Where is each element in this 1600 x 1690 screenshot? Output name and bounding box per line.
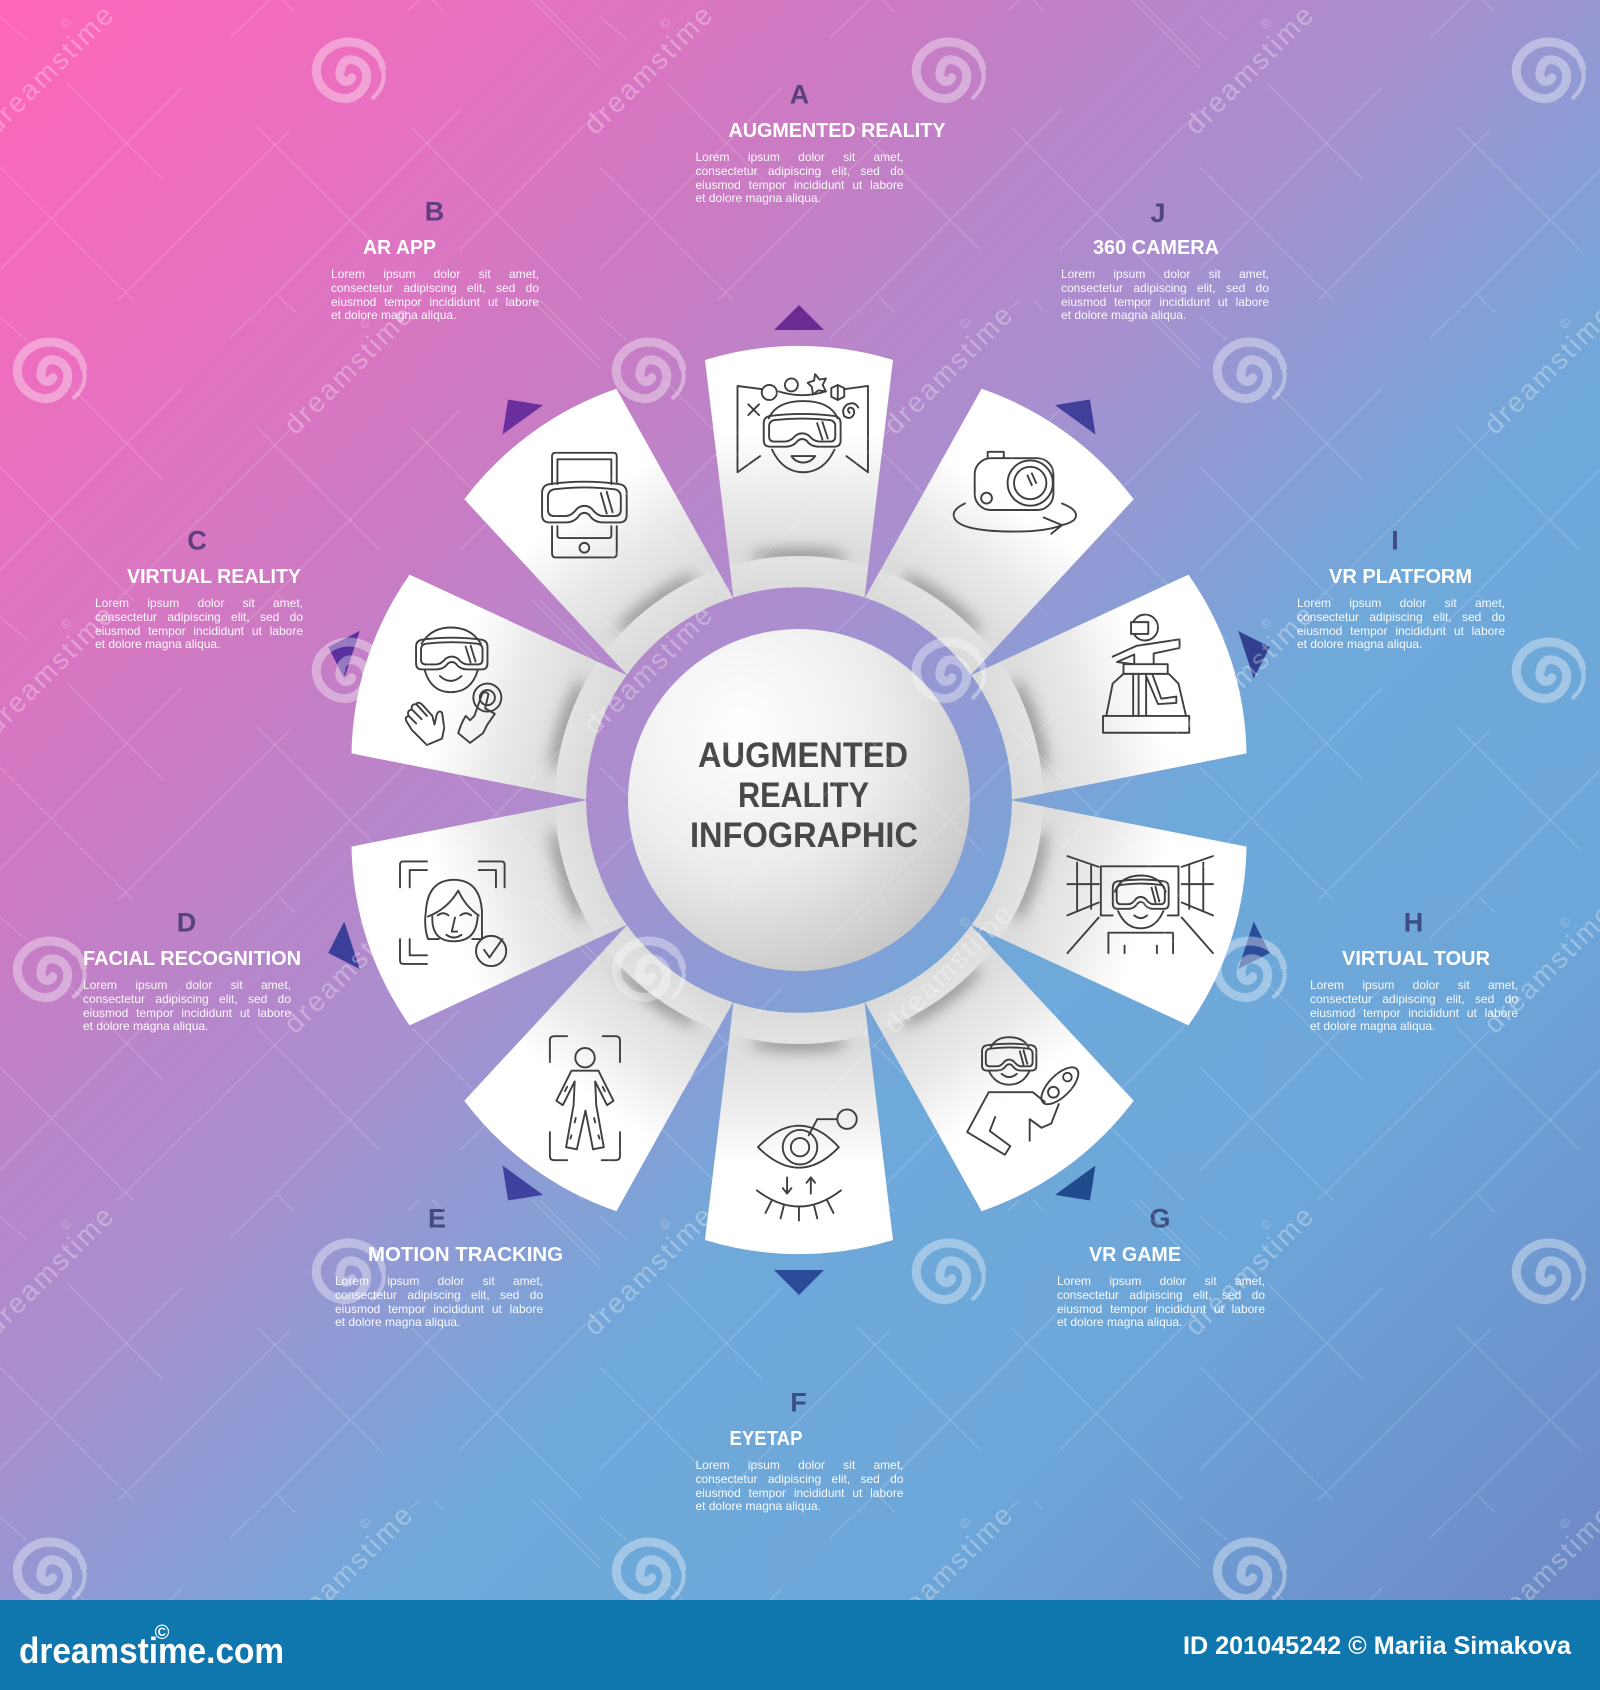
text block H: Lorem ipsum dolor sit amet, [1310, 978, 1518, 992]
watermark wordmarks: © [1257, 1215, 1275, 1233]
text block J: eiusmod tempor incididunt ut labore [1061, 295, 1269, 309]
text block D: eiusmod tempor incididunt ut labore [83, 1006, 291, 1020]
text block F: consectetur adipiscing elit, sed do [696, 1472, 904, 1486]
icon: VR platform [1103, 615, 1189, 733]
text block J [1061, 198, 1269, 322]
text block F: et dolore magna aliqua. [696, 1499, 821, 1513]
title [690, 736, 918, 855]
text block C: consectetur adipiscing elit, sed do [95, 610, 303, 624]
panel: petal H [492, 493, 1306, 1172]
text block B: B [425, 196, 444, 226]
text block E: eiusmod tempor incididunt ut labore [335, 1302, 543, 1316]
text block C: Lorem ipsum dolor sit amet, [95, 596, 303, 610]
title: AUGMENTED [698, 736, 908, 775]
text block B: consectetur adipiscing elit, sed do [331, 281, 539, 295]
footer banner [0, 1600, 1600, 1690]
text block B: Lorem ipsum dolor sit amet, [331, 267, 539, 281]
text block H: VIRTUAL TOUR [1342, 948, 1491, 970]
text block B: eiusmod tempor incididunt ut labore [331, 295, 539, 309]
text block F: Lorem ipsum dolor sit amet, [696, 1458, 904, 1472]
icon: 360 camera [954, 452, 1076, 534]
watermark wordmarks: © [1556, 1514, 1574, 1532]
text block E: Lorem ipsum dolor sit amet, [335, 1274, 543, 1288]
icon: facial recognition [400, 861, 506, 966]
text block I: I [1391, 526, 1399, 556]
text block H [1310, 908, 1518, 1033]
text block J: J [1150, 198, 1166, 228]
watermark wordmarks: dreamstime [278, 899, 418, 1039]
text block D: Lorem ipsum dolor sit amet, [83, 978, 291, 992]
text block D: consectetur adipiscing elit, sed do [83, 992, 291, 1006]
icon: phone with goggles [542, 453, 627, 557]
text block B [331, 196, 539, 322]
text block A: A [789, 80, 809, 110]
chart: ten petal wheel [328, 305, 1270, 1295]
watermark wordmarks: dreamstime [878, 899, 1018, 1039]
text block G: eiusmod tempor incididunt ut labore [1057, 1302, 1265, 1316]
panel: petal B [335, 289, 1140, 1141]
panel: petal F [555, 556, 1043, 1254]
text block C: et dolore magna aliqua. [95, 637, 220, 651]
text block G: G [1149, 1204, 1171, 1234]
text block I: eiusmod tempor incididunt ut labore [1297, 624, 1505, 638]
image credit: ID 201045242 © Mariia Simakova [1183, 1632, 1572, 1660]
watermark wordmarks: dreamstime [578, 0, 718, 140]
panel: petal E [335, 459, 1140, 1311]
watermark wordmarks: © [656, 614, 674, 632]
text block G: VR GAME [1089, 1244, 1181, 1266]
text block D: FACIAL RECOGNITION [83, 948, 301, 970]
text block H: et dolore magna aliqua. [1310, 1019, 1435, 1033]
watermark wordmarks: dreamstime [578, 1201, 718, 1341]
text block D: D [177, 908, 196, 938]
text block E: E [428, 1204, 446, 1234]
text block I: consectetur adipiscing elit, sed do [1297, 610, 1505, 624]
text block G: et dolore magna aliqua. [1057, 1315, 1182, 1329]
watermark wordmarks: © [57, 614, 75, 632]
arrow markers [321, 305, 1277, 1295]
logo wordmark: © [155, 1622, 170, 1644]
text block E: et dolore magna aliqua. [335, 1315, 460, 1329]
watermark wordmarks: © [956, 314, 974, 332]
text block C: C [187, 526, 207, 556]
text block A: Lorem ipsum dolor sit amet, [696, 150, 904, 164]
logo wordmark: dreamstime.com [19, 1630, 284, 1671]
watermark wordmarks: © [1556, 314, 1574, 332]
watermark wordmarks: dreamstime [1179, 0, 1319, 140]
watermark wordmarks: © [956, 913, 974, 931]
text block F: EYETAP [729, 1428, 802, 1450]
text block I: et dolore magna aliqua. [1297, 637, 1422, 651]
text block J: Lorem ipsum dolor sit amet, [1061, 267, 1269, 281]
panel: petal I [492, 428, 1306, 1107]
text block F [696, 1388, 904, 1513]
text block C: VIRTUAL REALITY [127, 566, 302, 588]
text block C [95, 526, 303, 651]
icon: goggles, hands and touch [406, 628, 501, 745]
watermark wordmarks: dreamstime [1179, 600, 1319, 740]
center circle with title [628, 629, 970, 971]
text block A: consectetur adipiscing elit, sed do [696, 164, 904, 178]
text block D [83, 908, 301, 1033]
icon: virtual tour room [1067, 856, 1213, 953]
watermark wordmarks: dreamstime [878, 1500, 1018, 1640]
text block E: MOTION TRACKING [368, 1244, 563, 1266]
panel: petal A [555, 346, 1043, 1044]
watermark wordmarks: © [1257, 614, 1275, 632]
watermark wordmarks: © [956, 1514, 974, 1532]
icon: VR game player [967, 1037, 1084, 1155]
text block A [696, 80, 946, 205]
text block H: H [1404, 908, 1423, 938]
icon: augmented reality world [737, 374, 868, 472]
icon: motion tracking body [550, 1036, 620, 1160]
watermark wordmarks: © [656, 1215, 674, 1233]
watermark wordmarks: © [356, 1514, 374, 1532]
text block F: F [790, 1388, 806, 1418]
text block A: AUGMENTED REALITY [728, 120, 946, 142]
text block G: consectetur adipiscing elit, sed do [1057, 1288, 1265, 1302]
watermark wordmarks: © [356, 913, 374, 931]
text block E [335, 1204, 563, 1329]
title: REALITY [738, 776, 869, 815]
text block H: consectetur adipiscing elit, sed do [1310, 992, 1518, 1006]
watermark wordmarks: dreamstime [278, 1500, 418, 1640]
watermark wordmarks: © [356, 314, 374, 332]
text block H: eiusmod tempor incididunt ut labore [1310, 1006, 1518, 1020]
text block D: et dolore magna aliqua. [83, 1019, 208, 1033]
text block B: AR APP [363, 237, 436, 259]
text block J: et dolore magna aliqua. [1061, 308, 1186, 322]
watermark wordmarks: dreamstime [578, 600, 718, 740]
text block A: eiusmod tempor incididunt ut labore [696, 178, 904, 192]
watermark wordmarks: © [57, 14, 75, 32]
text block A: et dolore magna aliqua. [696, 191, 821, 205]
text block I [1297, 526, 1505, 651]
panel: petal J [458, 289, 1263, 1141]
watermark wordmarks: © [656, 14, 674, 32]
text block E: consectetur adipiscing elit, sed do [335, 1288, 543, 1302]
text block I: VR PLATFORM [1329, 566, 1472, 588]
text block J: 360 CAMERA [1093, 237, 1219, 259]
text block B: et dolore magna aliqua. [331, 308, 456, 322]
watermark wordmarks: © [1257, 14, 1275, 32]
watermark wordmarks: © [57, 1215, 75, 1233]
text block I: Lorem ipsum dolor sit amet, [1297, 596, 1505, 610]
panel: petal C [292, 428, 1106, 1107]
watermark wordmarks: dreamstime [278, 300, 418, 440]
text block J: consectetur adipiscing elit, sed do [1061, 281, 1269, 295]
panel: petal G [458, 459, 1263, 1311]
panel: petal D [292, 493, 1106, 1172]
watermark wordmarks: dreamstime [1179, 1201, 1319, 1341]
title: INFOGRAPHIC [690, 816, 918, 855]
watermark wordmarks: © [1556, 913, 1574, 931]
text block F: eiusmod tempor incididunt ut labore [696, 1486, 904, 1500]
text block G [1057, 1204, 1265, 1329]
text block G: Lorem ipsum dolor sit amet, [1057, 1274, 1265, 1288]
watermark wordmarks: dreamstime [878, 300, 1018, 440]
text block C: eiusmod tempor incididunt ut labore [95, 624, 303, 638]
icon: eye tracking [757, 1109, 857, 1221]
